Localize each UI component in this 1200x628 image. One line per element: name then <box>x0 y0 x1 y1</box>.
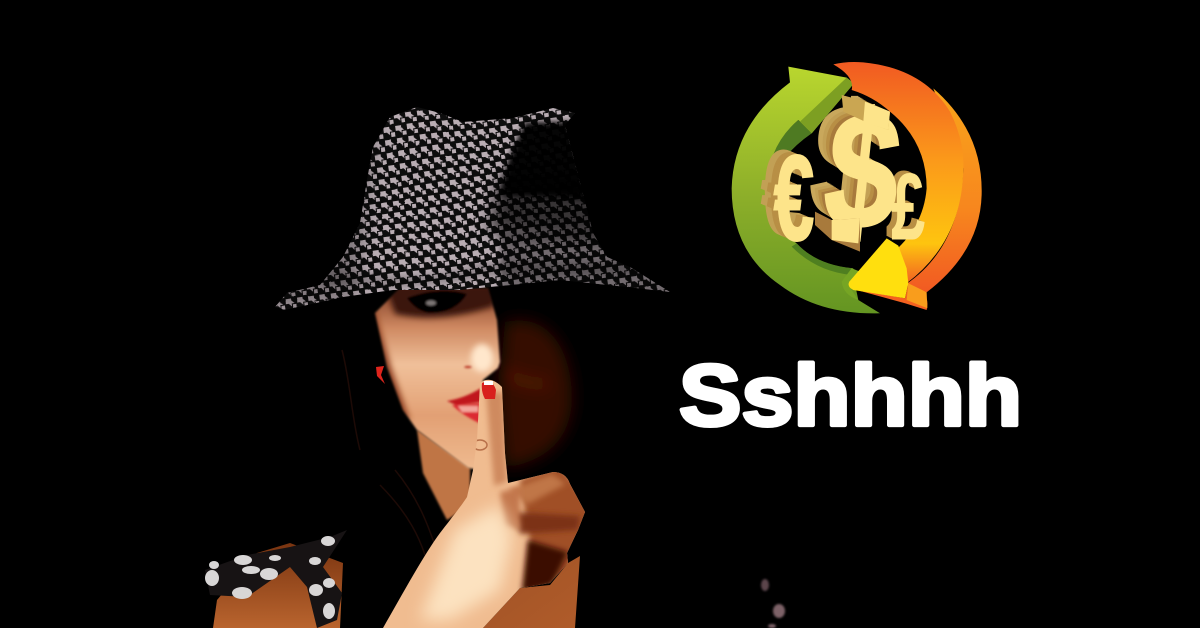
lips <box>447 388 481 424</box>
face <box>360 285 500 470</box>
polka dot bow <box>205 530 347 628</box>
euro symbol: € <box>774 130 814 266</box>
photo: woman in houndstooth hat making a shush gesture <box>205 107 786 628</box>
pound symbol: £ <box>891 154 925 259</box>
nostril <box>464 366 472 368</box>
neck <box>417 430 470 520</box>
headline: Sshhhh: Sshhhh <box>679 348 1022 444</box>
left shoulder <box>213 543 343 628</box>
right shoulder <box>483 556 580 628</box>
yellow arrowhead <box>849 238 927 310</box>
far right dress dots <box>761 579 785 628</box>
orange arrow <box>833 62 982 292</box>
hair shadow strands <box>342 350 440 560</box>
green arrow <box>732 67 880 313</box>
fingernail <box>482 381 496 399</box>
earring <box>376 366 385 384</box>
houndstooth hat <box>276 107 670 310</box>
shadowed cheek <box>498 320 572 468</box>
dollar symbol: $ <box>817 79 909 263</box>
hand and raised finger <box>380 375 595 628</box>
dollar bars <box>815 95 890 252</box>
